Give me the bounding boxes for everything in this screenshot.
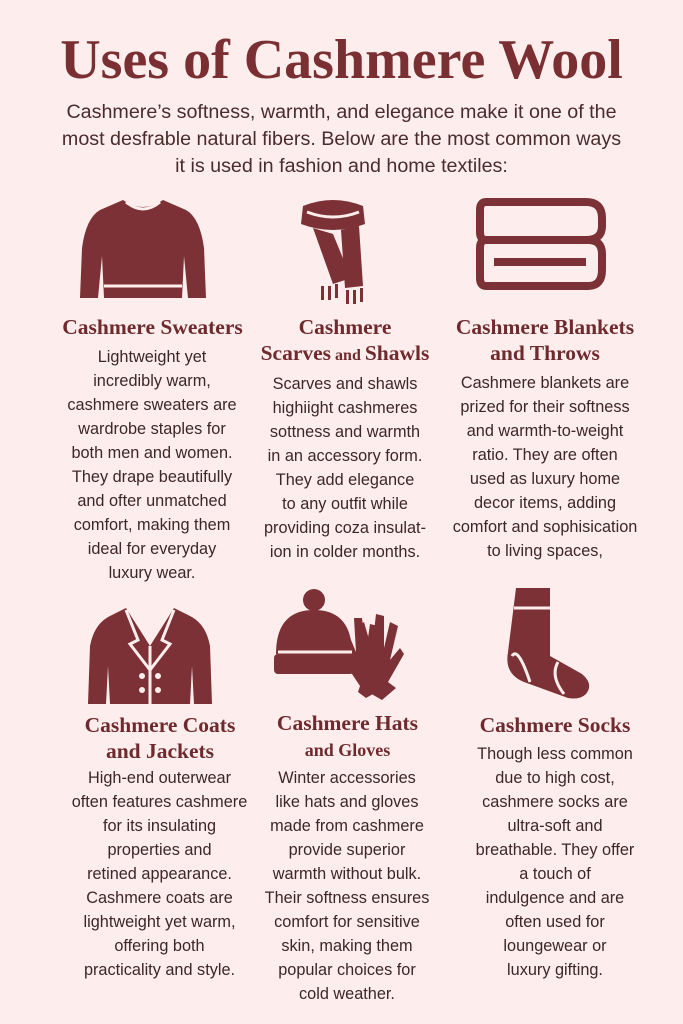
heading: hats: and Gloves: [305, 740, 390, 760]
heading: scarves: Cashmere: [299, 315, 391, 339]
heading: coats: Cashmere Coats: [85, 713, 235, 737]
intro text: it is used in fashion and home textiles:: [175, 155, 508, 177]
text: coats: offering both: [114, 937, 205, 955]
heading: hats: [277, 711, 418, 760]
text: hats: skin, making them: [281, 937, 413, 955]
text: scarves: providing coza insulat-: [264, 519, 426, 537]
text: sweaters: They drape beautifully: [72, 468, 232, 486]
heading: blankets: Cashmere Blankets: [456, 315, 634, 339]
text: hats: warmth without bulk.: [273, 865, 421, 883]
text: scarves: ion in colder months.: [270, 543, 420, 561]
text: coats: practicality and style.: [84, 961, 235, 979]
text: scarves: in an accessory form.: [268, 447, 422, 465]
text: scarves: sottness and warmth: [270, 423, 420, 441]
title: Uses of Cashmere Wool: [60, 29, 623, 91]
icon: blanket: [476, 198, 606, 290]
text: hats: made from cashmere: [270, 817, 424, 835]
heading: sweaters: Cashmere Sweaters: [62, 315, 243, 339]
text: socks: loungewear or: [503, 937, 607, 955]
heading: hats: Cashmere Hats: [277, 711, 418, 735]
text: sweaters: and ofter unmatched: [77, 492, 227, 510]
intro text: [62, 101, 621, 177]
text: blankets: comfort and sophisication: [453, 518, 637, 536]
text: hats: Winter accessories: [278, 769, 416, 787]
text: socks: often used for: [505, 913, 605, 931]
text: scarves: highiight cashmeres: [273, 399, 417, 417]
text: scarves: They add elegance: [276, 471, 414, 489]
icon: sweater: [80, 200, 206, 298]
text: coats: often features cashmere: [72, 793, 247, 811]
text: socks: luxury gifting.: [507, 961, 603, 979]
text: socks: a touch of: [519, 865, 591, 883]
text: blankets: decor items, adding: [474, 494, 616, 512]
text: coats: Cashmere coats are: [86, 889, 233, 907]
text: blankets: used as luxury home: [470, 470, 620, 488]
text: blankets: and warmth-to-weight: [467, 422, 623, 440]
text: socks: breathable. They offer: [476, 841, 634, 859]
text: sweaters: Lightweight yet: [98, 348, 206, 366]
text: scarves: [264, 375, 426, 561]
text: socks: indulgence and are: [486, 889, 624, 907]
text: sweaters: both men and women.: [71, 444, 233, 462]
text: blankets: prized for their softness: [460, 398, 630, 416]
icon: hat and gloves: [274, 589, 404, 700]
text: sweaters: cashmere sweaters are: [67, 396, 237, 414]
text: blankets: ratio. They are often: [472, 446, 618, 464]
text: socks: cashmere socks are: [482, 793, 628, 811]
icon: coat: [88, 608, 212, 704]
text: sweaters: [67, 348, 237, 582]
icon: scarf: [301, 200, 365, 304]
text: sweaters: incredibly warm,: [93, 372, 211, 390]
heading: coats: and Jackets: [106, 739, 214, 763]
text: socks: [476, 745, 634, 979]
heading: scarves: Scarves and Shawls: [261, 341, 429, 365]
heading: socks: Cashmere Socks: [480, 713, 630, 737]
text: coats: High-end outerwear: [88, 769, 231, 787]
intro text: Cashmere’s softness, warmth, and elegance make it one of the: [66, 101, 617, 123]
text: hats: [265, 769, 429, 1003]
text: coats: lightweight yet warm,: [83, 913, 236, 931]
text: sweaters: wardrobe staples for: [78, 420, 226, 438]
text: sweaters: ideal for everyday: [88, 540, 216, 558]
text: hats: cold weather.: [299, 985, 395, 1003]
heading: coats: [85, 713, 235, 763]
text: sweaters: comfort, making them: [74, 516, 230, 534]
text: hats: Their softness ensures: [265, 889, 429, 907]
text: sweaters: luxury wear.: [109, 564, 195, 582]
text: hats: popular choices for: [278, 961, 416, 979]
text: scarves: to any outfit while: [282, 495, 408, 513]
text: blankets: Cashmere blankets are: [461, 374, 629, 392]
icon: sock: [507, 588, 590, 698]
text: blankets: to living spaces,: [487, 542, 603, 560]
text: hats: like hats and gloves: [275, 793, 418, 811]
text: scarves: Scarves and shawls: [273, 375, 417, 393]
text: hats: provide superior: [289, 841, 405, 859]
heading: blankets: and Throws: [490, 341, 600, 365]
text: socks: Though less common: [477, 745, 633, 763]
text: blankets: [453, 374, 637, 560]
text: socks: due to high cost,: [495, 769, 615, 787]
text: coats: retined appearance.: [87, 865, 232, 883]
text: coats: for its insulating: [103, 817, 216, 835]
text: coats: properties and: [107, 841, 212, 859]
intro text: most desfrable natural fibers. Below are the most common ways: [62, 128, 621, 150]
heading: scarves: [261, 315, 429, 365]
text: socks: ultra-soft and: [507, 817, 603, 835]
text: coats: [72, 769, 247, 979]
text: hats: comfort for sensitive: [274, 913, 420, 931]
heading: blankets: [456, 315, 634, 365]
